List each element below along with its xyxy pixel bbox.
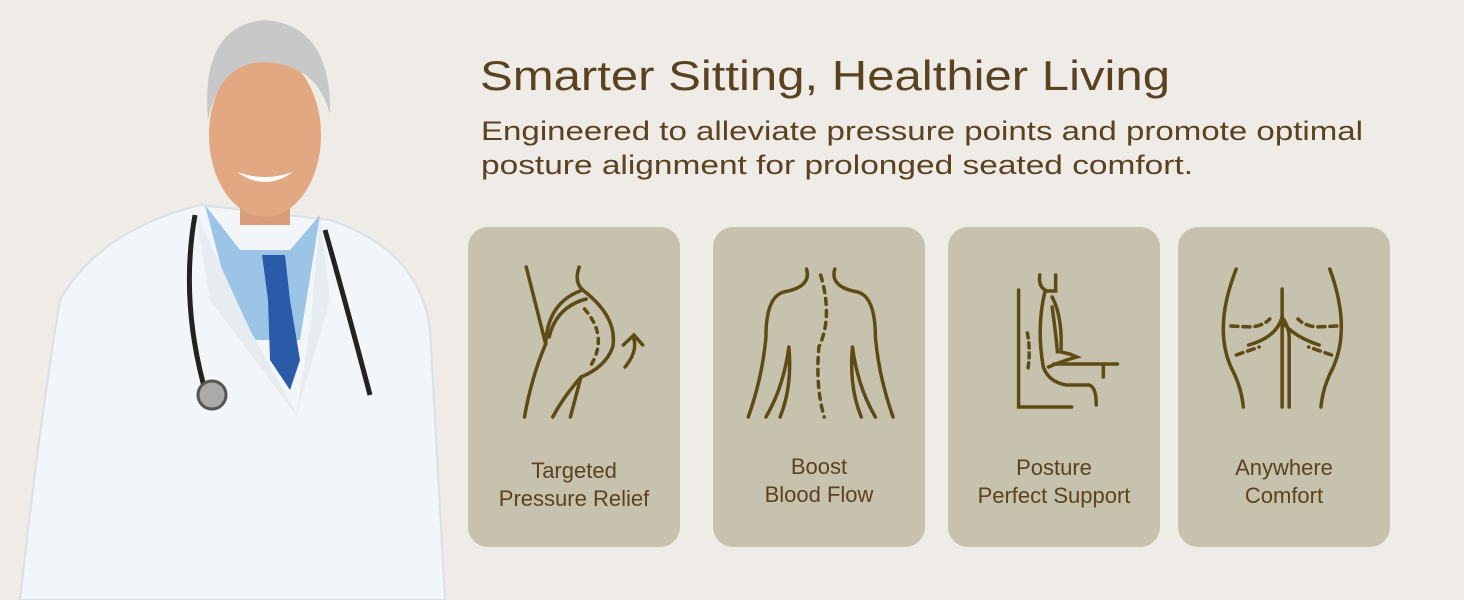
label: Perfect Support xyxy=(978,483,1130,508)
label: Targeted xyxy=(531,458,617,483)
panel: boost blood flow xyxy=(713,227,925,547)
icon: hip xyxy=(522,265,644,419)
icon: back xyxy=(746,267,895,419)
title: posture alignment for prolonged seated comfort. xyxy=(481,150,1193,180)
label: Blood Flow xyxy=(765,482,873,507)
label: Pressure Relief xyxy=(499,486,649,511)
label: Comfort xyxy=(1245,483,1323,508)
panel: posture perfect support xyxy=(948,227,1160,547)
panel: anywhere comfort xyxy=(1178,227,1390,547)
icon: seated posture xyxy=(1016,273,1120,409)
title: Engineered to alleviate pressure points and promote optimal xyxy=(481,116,1363,146)
icon: seat xyxy=(1222,267,1344,409)
panel: targeted pressure relief xyxy=(468,227,680,547)
label xyxy=(978,455,1130,508)
label xyxy=(499,458,650,511)
label: Boost xyxy=(791,454,847,479)
title xyxy=(480,52,1363,180)
label: Anywhere xyxy=(1235,455,1333,480)
label: Posture xyxy=(1016,455,1092,480)
label xyxy=(1235,455,1333,508)
title: Smarter Sitting, Healthier Living xyxy=(480,52,1170,99)
label xyxy=(765,454,874,507)
doctor illustration xyxy=(19,20,446,600)
